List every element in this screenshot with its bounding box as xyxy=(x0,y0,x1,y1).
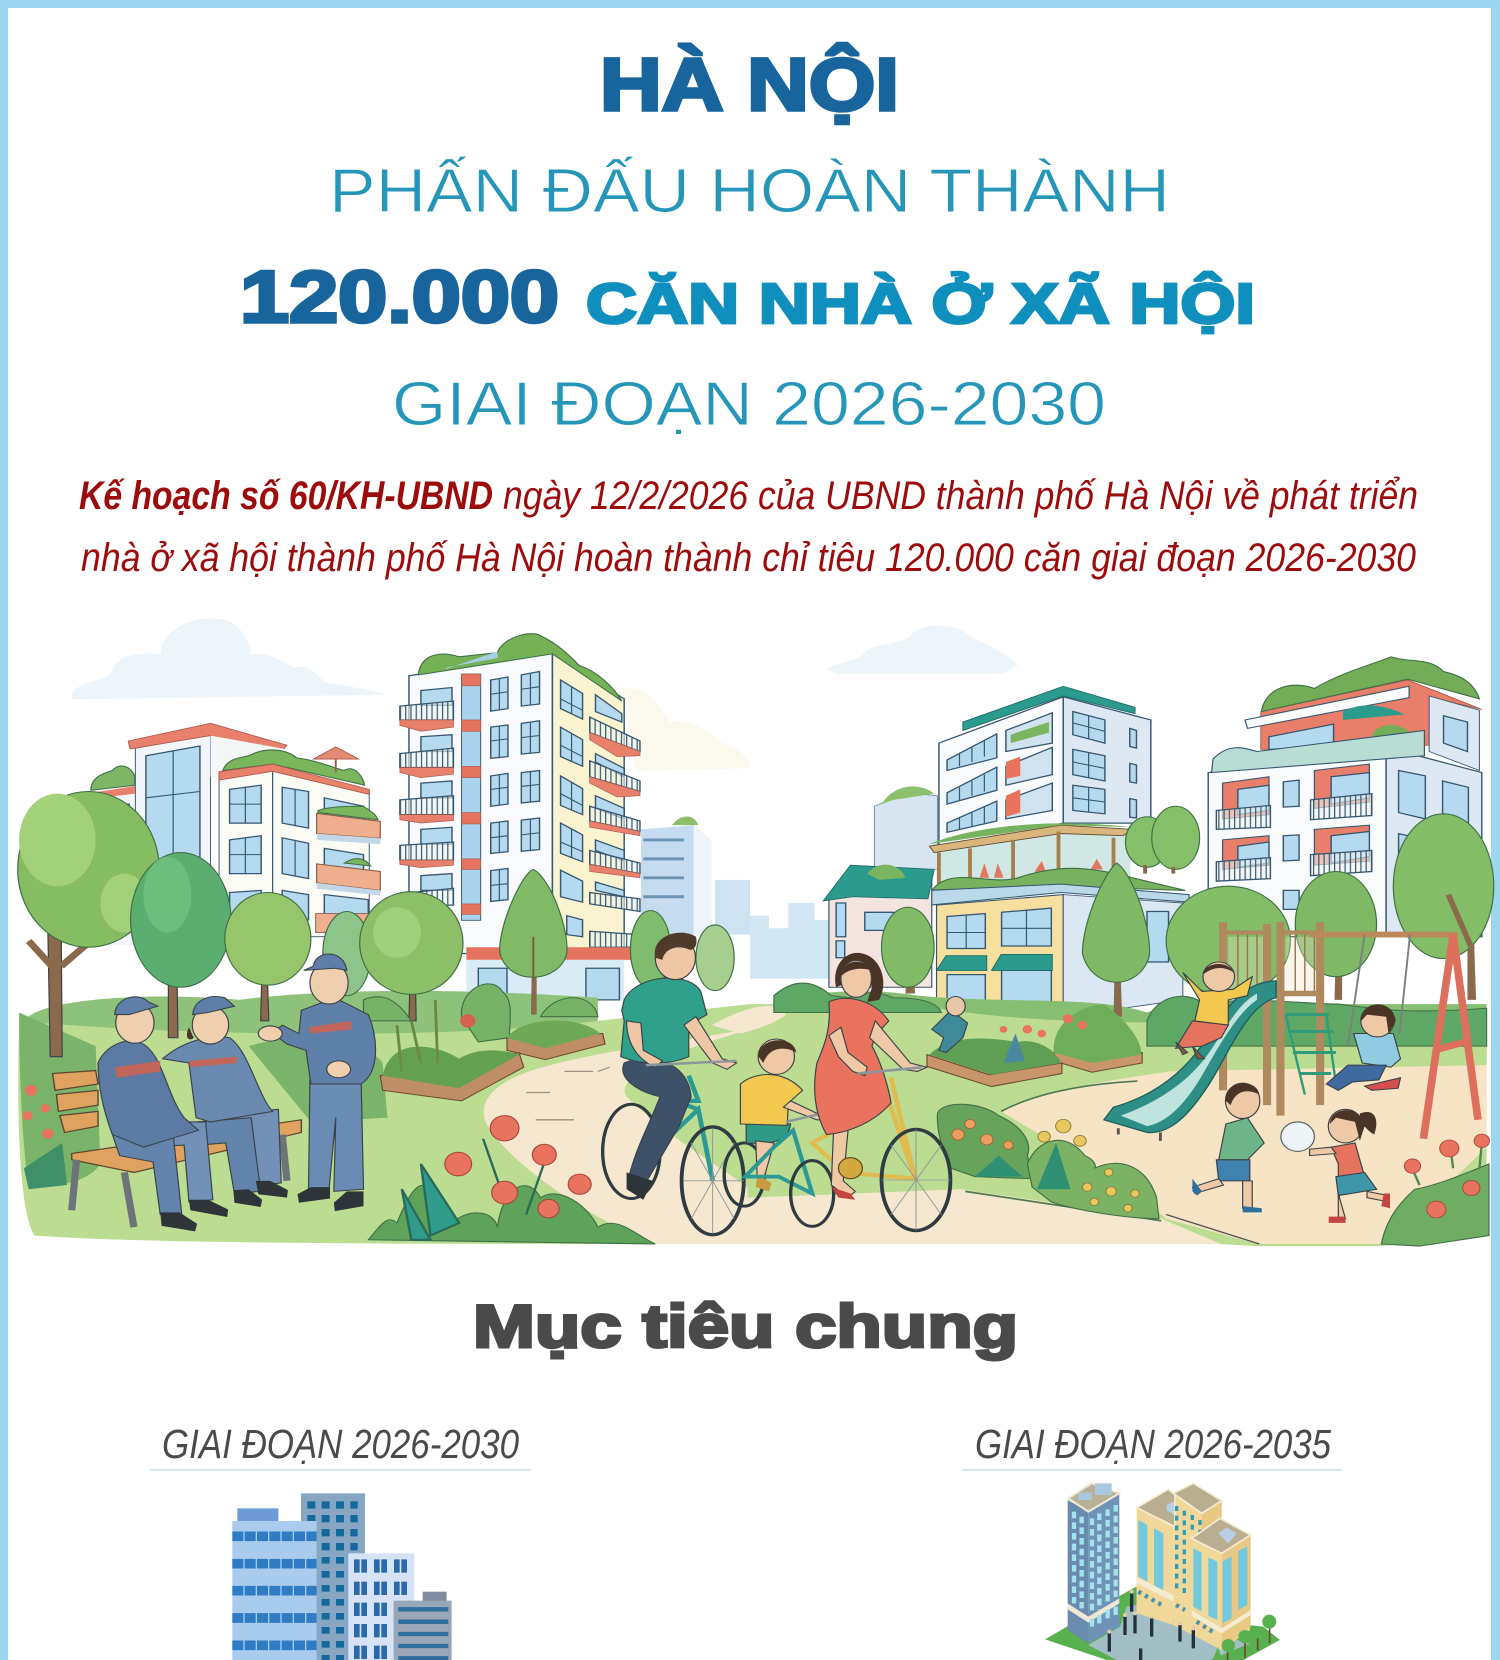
tree: teal xyxy=(131,853,231,1038)
teal-roof building xyxy=(939,686,1151,853)
raised garden beds right xyxy=(927,1004,1142,1087)
heading: phấn đấu hoàn thành: PHẤN ĐẤU HOÀN THÀNH xyxy=(329,157,1170,226)
section title: mục tiêu chung: Mục tiêu chung xyxy=(473,1293,1018,1360)
intro text xyxy=(79,474,1418,580)
căn nhà ở xã hội: CĂN NHÀ Ở XÃ HỘI xyxy=(586,271,1255,336)
terrace level xyxy=(929,823,1189,905)
heading: 120.000 căn nhà ở xã hội xyxy=(240,257,1255,338)
right half of scene xyxy=(712,626,1494,1246)
mother on bike xyxy=(812,953,950,1231)
lower hedge band xyxy=(29,991,598,1063)
worker standing xyxy=(258,954,376,1211)
trees background small xyxy=(630,911,734,991)
intro text: Kế hoạch số 60/KH-UBND xyxy=(79,474,493,518)
column: 2026-2030 xyxy=(150,1421,531,1660)
bushes foreground right xyxy=(937,1104,1159,1219)
bush bottom right xyxy=(1381,1134,1489,1246)
gardener xyxy=(932,996,968,1052)
worker seated right xyxy=(163,996,288,1207)
shade patches xyxy=(19,1012,387,1189)
back grey building xyxy=(874,793,937,869)
back buildings xyxy=(641,816,750,937)
yellow lower building xyxy=(937,895,1183,1017)
tree: rounded xyxy=(360,892,463,1021)
trees right xyxy=(882,806,1494,1017)
flowers foreground xyxy=(22,1085,655,1244)
heading: giai đoạn 2026-2030: GIAI ĐOẠN 2026-2030 xyxy=(392,370,1106,439)
worker seated left xyxy=(98,997,228,1231)
ground with grass xyxy=(18,1004,750,1244)
title: Hà Nội: HÀ NỘI xyxy=(600,43,899,126)
child on swing xyxy=(1326,1004,1400,1090)
shrubs xyxy=(364,984,598,1042)
cloud right xyxy=(827,626,1018,674)
rear small bike wheel xyxy=(724,1143,764,1206)
tree: small xyxy=(225,893,311,1021)
illustration: residential park scene xyxy=(18,618,1494,1246)
tall apartment tower xyxy=(400,634,640,1000)
slide xyxy=(1104,981,1276,1141)
child on slide xyxy=(1176,962,1252,1059)
winding path xyxy=(484,1021,784,1244)
playground structure xyxy=(1223,922,1478,1139)
label 2026-2035: GIAI ĐOẠN 2026-2035 xyxy=(975,1421,1331,1467)
sand play area xyxy=(1001,1065,1487,1244)
icon: blue office buildings xyxy=(232,1493,452,1660)
tree: background xyxy=(323,911,371,996)
label 2026-2030: GIAI ĐOẠN 2026-2030 xyxy=(162,1421,519,1467)
bench xyxy=(53,1071,301,1227)
tree: cone xyxy=(500,869,567,1015)
cloud middle xyxy=(622,688,750,770)
raised garden beds xyxy=(380,1000,605,1101)
ground right xyxy=(748,1004,1487,1246)
column: 2026-2035 xyxy=(962,1421,1342,1660)
hedge front right xyxy=(774,983,1487,1046)
bicycle man xyxy=(603,933,744,1235)
trees left xyxy=(18,792,734,1057)
icon: isometric apartment complex xyxy=(1045,1483,1280,1660)
number 120.000: 120.000 xyxy=(240,257,559,338)
children with ball xyxy=(1192,1083,1390,1223)
boy on bike xyxy=(740,1039,834,1226)
road remnant top-left xyxy=(712,1006,786,1034)
hedge band right xyxy=(774,991,1487,1063)
bottom road xyxy=(748,1189,1221,1244)
building left back xyxy=(91,723,380,945)
left half of scene xyxy=(18,618,784,1244)
distant skyline xyxy=(750,903,829,979)
right apartment building xyxy=(1208,657,1482,937)
tree: large xyxy=(18,792,159,1057)
green roof house xyxy=(823,865,934,987)
cloud left xyxy=(72,618,387,699)
